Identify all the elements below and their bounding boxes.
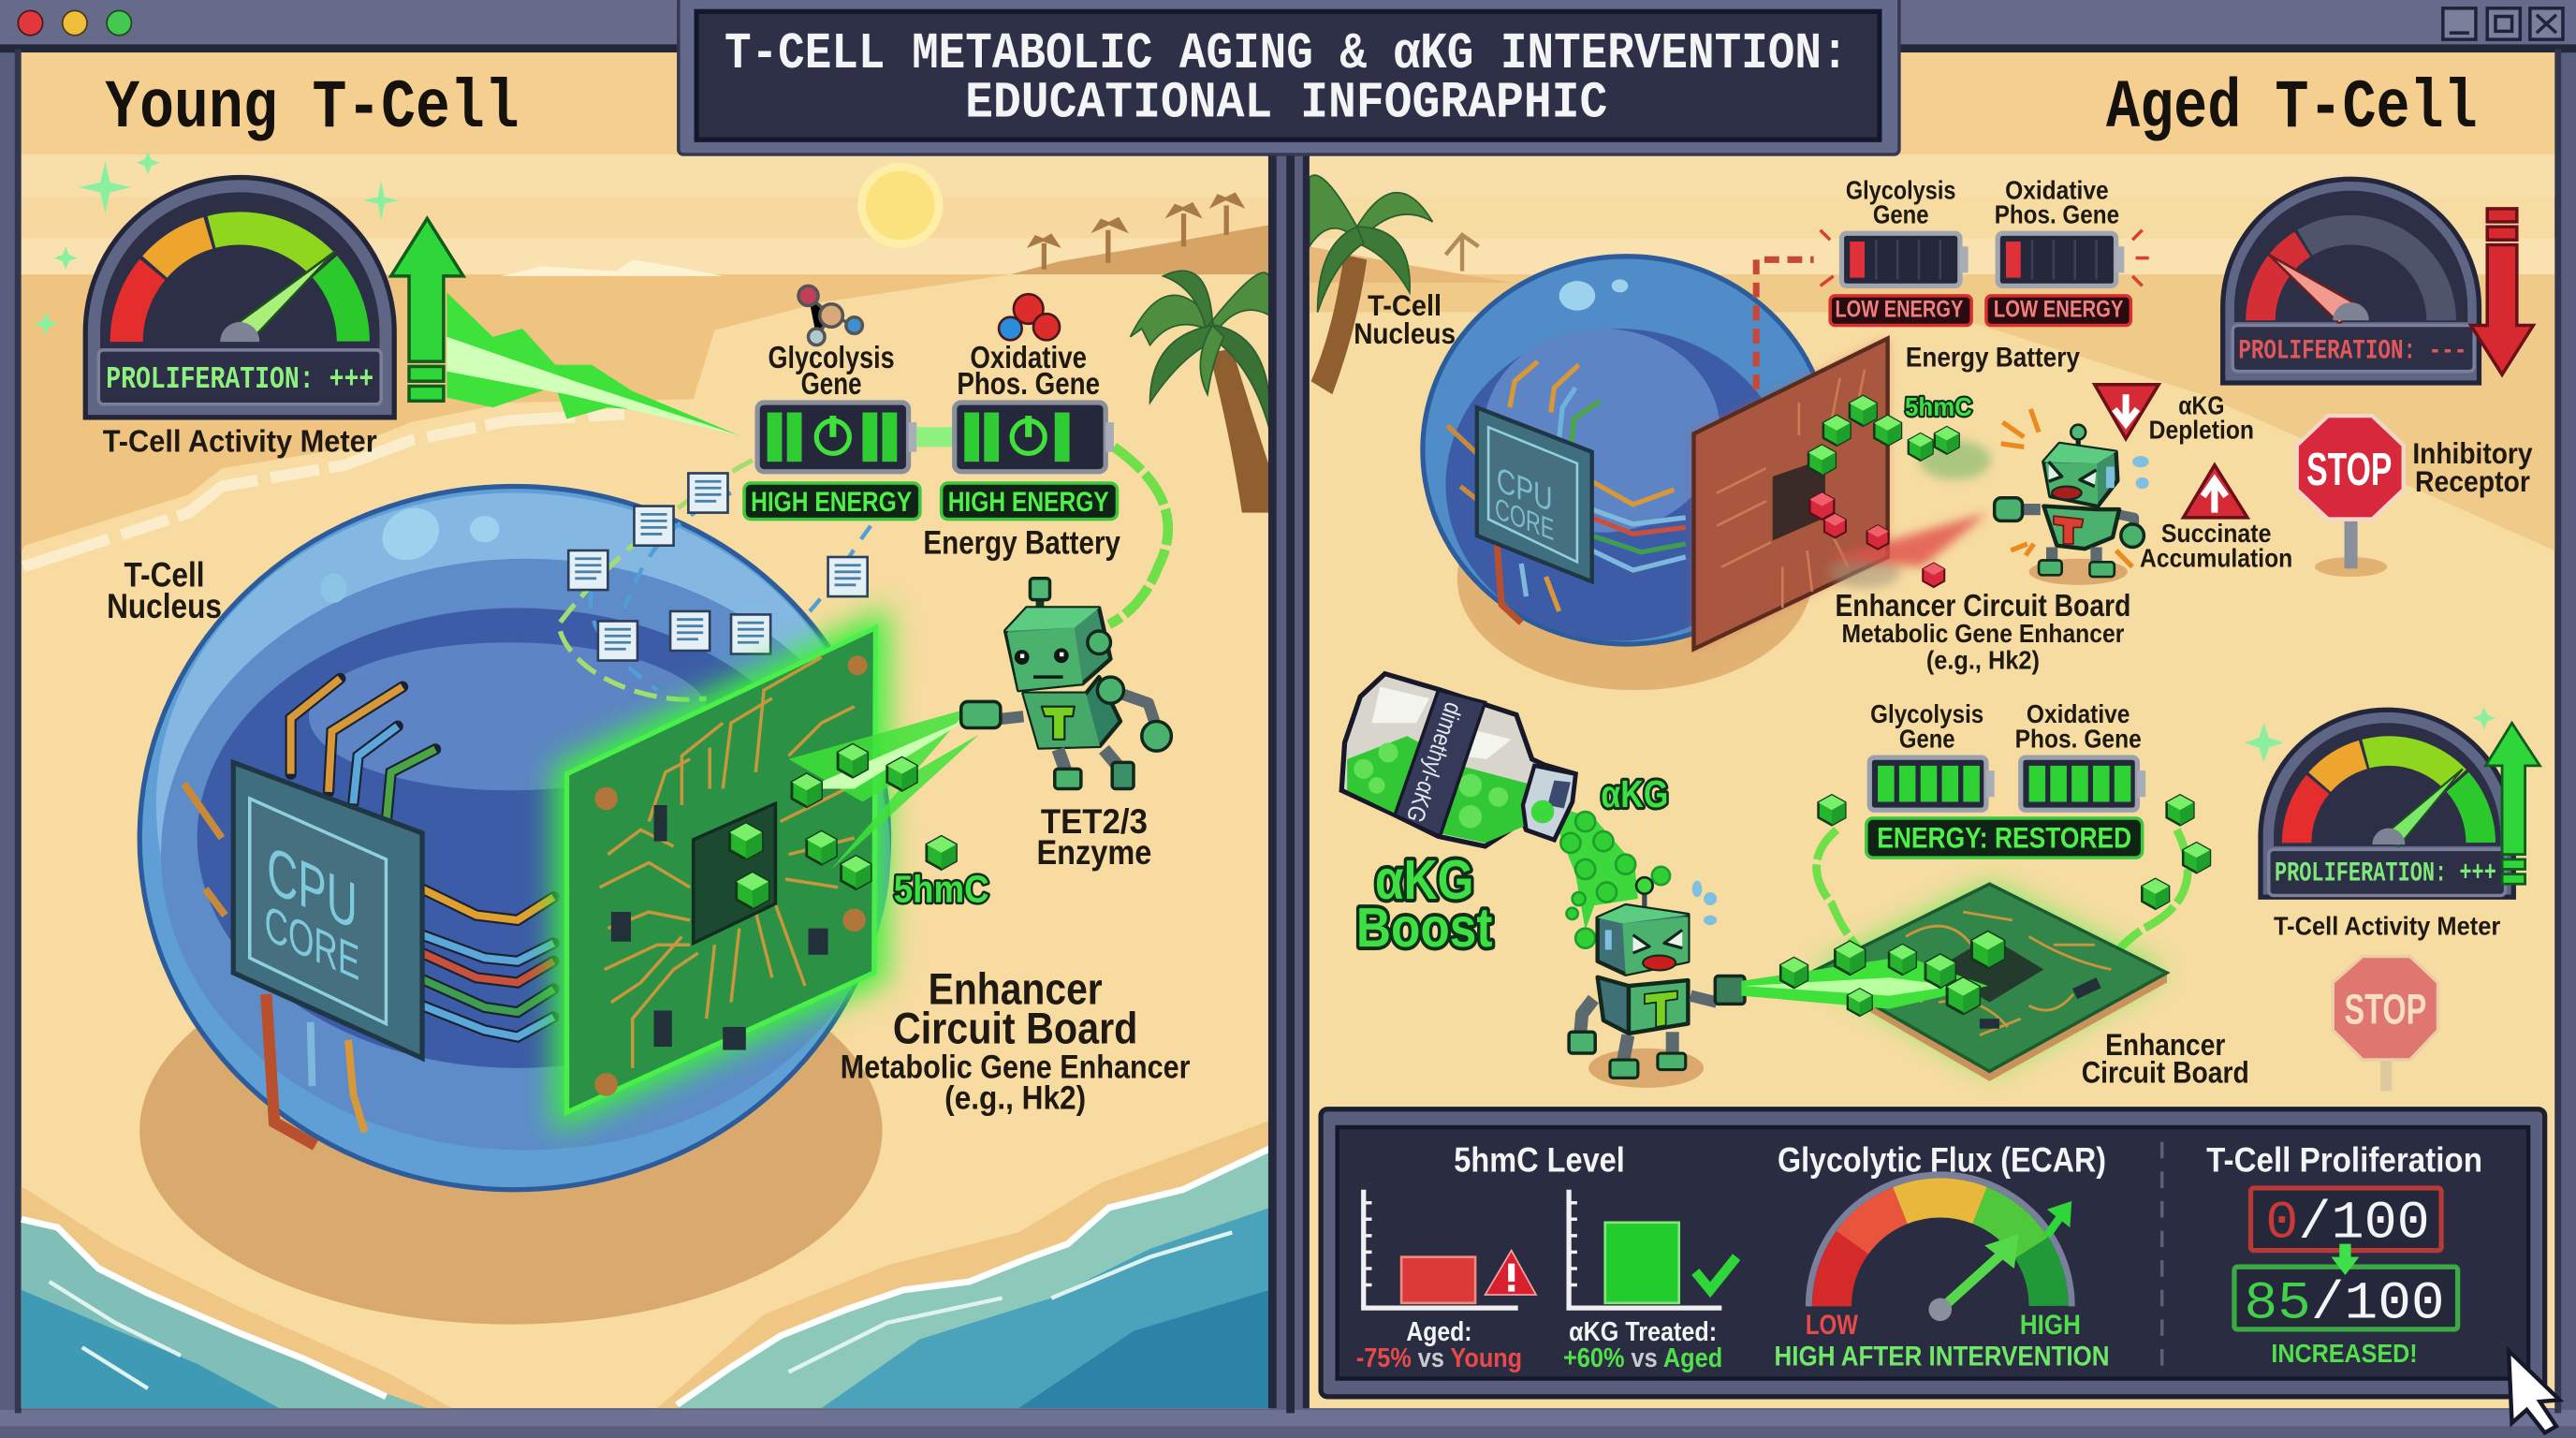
label: oxidative gene restored: [2015, 699, 2142, 754]
gauge: glycolytic flux: [1808, 1175, 2071, 1321]
label: aged stat: -75% vs Young: [1356, 1343, 1522, 1373]
label: αKG depletion: αKG: [2178, 390, 2224, 419]
label: nucleus aged: T-Cell: [1368, 288, 1442, 322]
label: treated stat: +60% vs Aged: [1563, 1343, 1722, 1373]
restored loops: [1817, 829, 2188, 970]
counter: 85/100: 85/100: [2244, 1274, 2445, 1334]
label: low: LOW: [1806, 1310, 1859, 1341]
icon: stop sign: [2297, 416, 2404, 577]
palm tree: [1131, 271, 1270, 513]
sparkles right: [2244, 707, 2496, 762]
dimethyl-αKG bottle: [1341, 674, 1575, 846]
left panel background: [22, 52, 1270, 1408]
enhancer circuit board glowing: [567, 627, 875, 1112]
label: glycolysis gene restored: [1870, 699, 1983, 754]
heading: Aged T-Cell: Aged T-Cell: [2106, 70, 2478, 148]
chart: treated bar: [1569, 1190, 1736, 1308]
TET robot: [961, 579, 1171, 788]
treated beam: [1741, 956, 1988, 1009]
arrow between counters: [2331, 1244, 2359, 1275]
label: inhibitory receptor: Inhibitory: [2412, 436, 2533, 470]
chart: aged bar: [1364, 1190, 1536, 1308]
heading: 5hmC level: 5hmC Level: [1454, 1140, 1625, 1179]
label: enhancer flat board: Circuit Board: [2082, 1056, 2249, 1090]
icon: succinate triangle: [2184, 465, 2247, 518]
label: succinate: Accumulation: [2140, 544, 2292, 573]
icon: faded stop sign: STOP: [2345, 985, 2426, 1033]
label: oxidative phos gene: [957, 341, 1100, 402]
label: high: HIGH: [2020, 1310, 2081, 1341]
label: energy battery aged: Energy Battery: [1906, 342, 2080, 373]
label: enhancer circuit board: Metabolic Gene Enhancer: [841, 1049, 1191, 1085]
label: TET enzyme: Enzyme: [1036, 833, 1151, 872]
label: nucleus: T-Cell: [124, 556, 205, 594]
down arrow aged: [2471, 209, 2533, 374]
window controls left: [18, 10, 131, 36]
heading: proliferation: T-Cell Proliferation: [2206, 1140, 2482, 1179]
ocean waves: [22, 1121, 1270, 1408]
title banner: EDUCATIONAL INFOGRAPHIC: [965, 76, 1607, 133]
label: nucleus: [107, 556, 222, 625]
label: glycolysis gene: Glycolysis: [768, 341, 895, 375]
label: energy battery: Energy Battery: [923, 524, 1120, 561]
dashed broken connection: [1756, 259, 1814, 389]
TET enzyme beam: [788, 708, 979, 871]
label: αKG: αKG: [1601, 772, 1668, 815]
heading: glycolytic flux: Glycolytic Flux (ECAR): [1778, 1140, 2106, 1179]
chip label: CORE: [265, 894, 359, 991]
proliferation beam: [446, 292, 739, 435]
label: glycolysis gene restored: Glycolysis: [1870, 699, 1983, 728]
smoke and red stream: [1827, 440, 1991, 588]
icon: stop sign: STOP: [2306, 445, 2392, 495]
title banner: T-CELL METABOLIC AGING & αKG INTERVENTION:: [724, 26, 1848, 83]
label: enhancer circuit board: (e.g., Hk2): [944, 1080, 1086, 1117]
label: glycolysis gene aged: Gene: [1873, 200, 1928, 229]
battery: glycolysis restored: [1869, 757, 1995, 810]
label: αKG depletion: Depletion: [2149, 416, 2254, 445]
gauge: restored proliferation: [2261, 710, 2513, 897]
tag: energy restored: ENERGY: RESTORED: [1877, 821, 2131, 855]
label: αKG Boost: [1356, 848, 1493, 959]
label: TET enzyme: [1036, 802, 1151, 872]
label: enhancer aged: Metabolic Gene Enhancer: [1841, 619, 2124, 648]
icon: mouse cursor: [2509, 1351, 2559, 1432]
sphere shadow: [139, 936, 882, 1325]
energy swirl to robot: [1109, 447, 1168, 624]
5hmC cubes on board: [730, 744, 956, 908]
gauge: restored proliferation: PROLIFERATION: +++: [2275, 858, 2496, 889]
icon: αKG depletion triangle: [2095, 385, 2159, 439]
chip label: CPU: [267, 830, 358, 945]
panel: Young T-Cell beach scene: [22, 52, 1270, 1408]
activity meter gauge young: PROLIFERATION: +++: [106, 362, 373, 398]
label: enhancer circuit board: Enhancer: [929, 964, 1103, 1014]
nucleus sphere: [139, 487, 890, 1190]
label: nucleus aged: Nucleus: [1354, 316, 1456, 350]
label: enhancer flat board: [2082, 1028, 2249, 1090]
counter: 0/100: 0/100: [2265, 1194, 2430, 1254]
restored cubes: [1780, 795, 2210, 1016]
chip label aged: CORE: [1495, 491, 1554, 547]
label: oxidative gene restored: Phos. Gene: [2015, 725, 2142, 754]
tag: high energy 2: HIGH ENERGY: [948, 487, 1109, 518]
panel: Aged T-Cell beach scene: [1310, 52, 2554, 1408]
label: succinate: [2140, 519, 2292, 573]
bottle label: dimethyl-αKG: [1401, 699, 1468, 826]
label: 5hmC: 5hmC: [894, 868, 989, 911]
gauge: aged proliferation: PROLIFERATION: ---: [2238, 335, 2466, 367]
battery: oxphos low: [1998, 230, 2149, 286]
label: enhancer circuit board: [841, 964, 1191, 1117]
damaged enhancer board: [1694, 339, 1888, 649]
green and red marker cubes: [1808, 396, 1959, 587]
label: enhancer aged: [1835, 589, 2130, 674]
label: oxidative gene aged: [1995, 175, 2119, 229]
flat enhancer board: [1814, 884, 2167, 1081]
label: glycolysis gene aged: [1846, 175, 1955, 229]
label: αKG depletion: [2149, 390, 2254, 445]
gauge: aged proliferation: [2223, 179, 2479, 383]
palm tree right: [1310, 175, 1432, 394]
label: oxidative gene aged: Phos. Gene: [1995, 200, 2119, 229]
label: oxidative gene restored: Oxidative: [2027, 699, 2130, 728]
window controls right: [2443, 8, 2563, 39]
CPU core chip with wires: [184, 679, 553, 1145]
tag: high energy 1: HIGH ENERGY: [751, 487, 912, 518]
icon: oxygen molecule: [999, 294, 1060, 340]
label: treated stat: αKG Treated:: [1569, 1317, 1717, 1347]
label: treated stat: [1563, 1317, 1722, 1373]
label: oxidative phos gene: Oxidative: [970, 341, 1087, 375]
label: succinate: Succinate: [2161, 519, 2271, 548]
label: enhancer aged: Enhancer Circuit Board: [1835, 589, 2130, 624]
chip label aged: CPU: [1497, 460, 1553, 521]
battery: oxphos high: [955, 403, 1114, 472]
distant palm islands: [1027, 192, 1245, 270]
label: high after intervention: HIGH AFTER INTERVENTION: [1775, 1342, 2110, 1372]
tag: low energy 1: LOW ENERGY: [1835, 298, 1963, 323]
label: enhancer flat board: Enhancer: [2105, 1028, 2226, 1062]
label: oxidative gene aged: Oxidative: [2005, 175, 2109, 204]
up arrow young: [391, 218, 463, 401]
label: inhibitory receptor: [2412, 436, 2533, 498]
battery: glycolysis high: [757, 403, 916, 472]
central divider: [1268, 52, 1310, 1413]
label: enhancer aged: (e.g., Hk2): [1926, 645, 2040, 674]
label: TET enzyme: TET2/3: [1041, 802, 1148, 841]
CPU core aged: [1447, 361, 1686, 623]
label: activity meter restored: T-Cell Activity Meter: [2274, 912, 2500, 941]
label: aged stat: [1356, 1317, 1522, 1373]
label: oxidative phos gene: Phos. Gene: [957, 367, 1100, 402]
label: nucleus aged: [1354, 288, 1456, 350]
label: 5hmC aged: 5hmC: [1905, 392, 1972, 421]
icon: faded stop sign: [2333, 956, 2438, 1091]
chip label aged: [1495, 460, 1554, 547]
treated robot: [1569, 877, 1745, 1088]
label: glycolysis gene restored: Gene: [1899, 725, 1955, 754]
battery: glycolysis low: [1821, 230, 1969, 286]
label: increased: INCREASED!: [2271, 1339, 2418, 1368]
battery: oxphos restored: [2021, 757, 2145, 810]
gene documents and transcript swirls: [559, 460, 871, 699]
label: aged stat: Aged:: [1406, 1317, 1472, 1347]
label: glycolysis gene: Gene: [801, 367, 862, 402]
panel: results dashboard: [1321, 1109, 2545, 1397]
label: inhibitory receptor: Receptor: [2415, 464, 2530, 498]
label: enhancer circuit board: Circuit Board: [893, 1005, 1137, 1054]
tag: low energy 2: LOW ENERGY: [1994, 298, 2123, 323]
label: nucleus: Nucleus: [107, 587, 222, 625]
sparkles: [35, 151, 399, 335]
heading: Young T-Cell: Young T-Cell: [105, 70, 520, 148]
label: activity meter: T-Cell Activity Meter: [103, 425, 377, 460]
title banner: [679, 0, 1899, 154]
angry robot: [1995, 409, 2149, 585]
right panel background: [1310, 52, 2554, 1408]
label: αKG Boost: αKG: [1375, 848, 1473, 911]
nucleus sphere aged: [1423, 257, 1830, 644]
pouring αKG stream: [1551, 805, 1670, 948]
dashed divider line: [2161, 1142, 2163, 1372]
battery link: [916, 427, 953, 447]
activity meter gauge young: [85, 178, 394, 418]
label: glycolysis gene aged: Glycolysis: [1846, 175, 1955, 204]
up arrow restored: [2485, 723, 2539, 884]
icon: glycolysis molecule: [798, 286, 862, 345]
chip label: [265, 830, 359, 991]
label: αKG Boost: Boost: [1356, 896, 1493, 959]
label: glycolysis gene: [768, 341, 895, 402]
